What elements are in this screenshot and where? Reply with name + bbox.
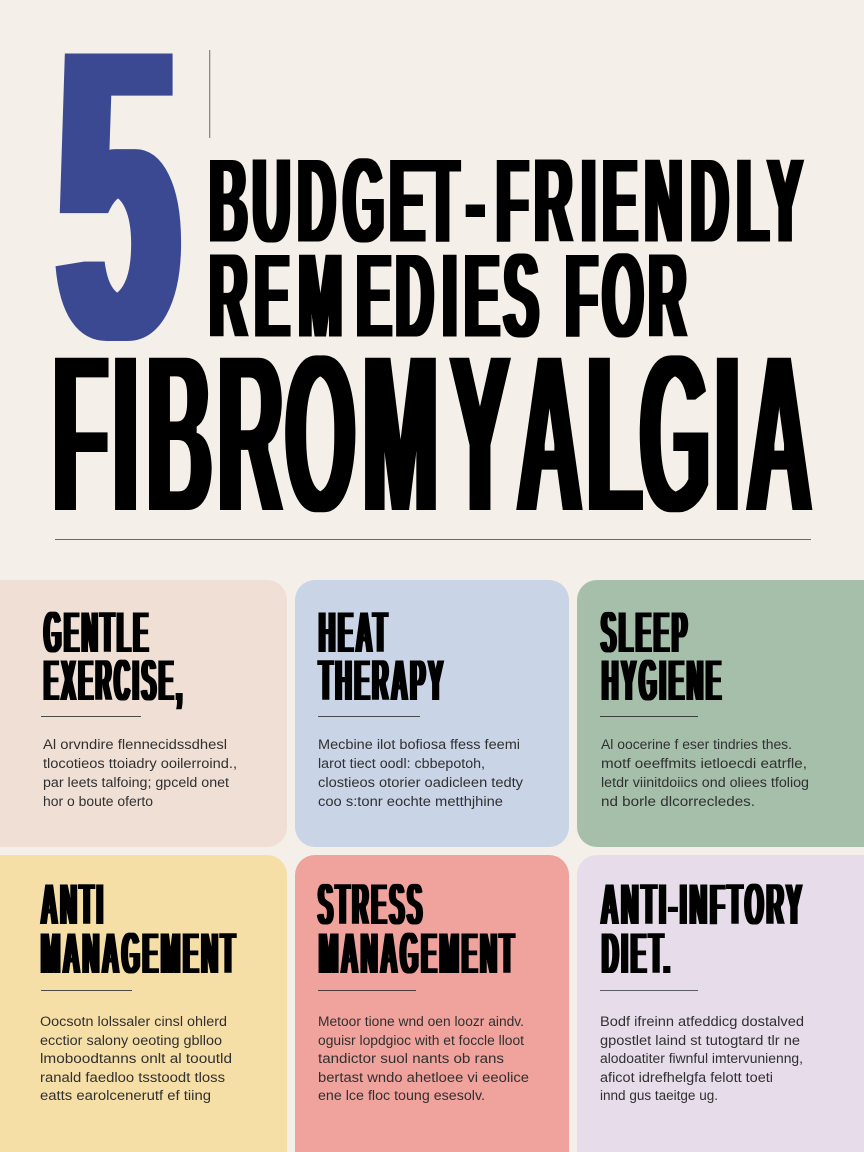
body text: tlocotieos ttoiadry ooilerroind.,: [43, 756, 237, 771]
body text: par leets talfoing; gpceld onet: [43, 775, 229, 790]
body text: oguisr lopdgioc with et foccle lloot: [318, 1033, 524, 1048]
body text: ene lce floc toung esesolv.: [318, 1088, 485, 1103]
body text: larot tiect oodl: cbbepotoh,: [318, 756, 485, 771]
body text: [43, 737, 237, 809]
panel: heat therapy: [295, 580, 569, 847]
title lines 1 and 2: REMEDIES FOR: [209, 227, 686, 363]
panel: anti management: ANTI: [41, 871, 106, 938]
rule: [318, 716, 420, 717]
body text: nd borle dlcorrecledes.: [601, 794, 755, 809]
body text: bertast wndo ahetloee vi eeolice: [318, 1070, 529, 1085]
body text: Metoor tione wnd oen loozr aindv.: [318, 1014, 524, 1029]
body text: hor o boute oferto: [43, 794, 153, 809]
rule: [41, 990, 132, 991]
title lines 1 and 2: [209, 132, 803, 363]
panel: gentle exercise: GENTLE: [44, 599, 151, 666]
rule: [600, 990, 698, 991]
title: [53, 132, 812, 562]
rule: [41, 716, 141, 717]
panel: sleep hygiene: [577, 580, 864, 847]
vertical rule: [209, 50, 210, 138]
body text: innd gus taeitge ug.: [600, 1088, 718, 1103]
panel: heat therapy: THERAPY: [319, 647, 446, 714]
title lines 1 and 2: BUDGET-FRIENDLY: [209, 132, 803, 268]
body text: tandictor suol nants ob rans: [318, 1051, 504, 1066]
body text: coo s:tonr eochte metthjhine: [318, 794, 503, 809]
body text: lmoboodtanns onlt al tooutld: [40, 1051, 232, 1066]
text: MANAGEMENT: [319, 920, 517, 987]
body text: clostieos otorier oadicleen tedty: [318, 775, 523, 790]
body text: Oocsotn lolssaler cinsl ohlerd: [40, 1014, 227, 1029]
body text: alodoatiter fiwnful imtervunienng,: [600, 1051, 803, 1066]
body text: Bodf ifreinn atfeddicg dostalved: [600, 1014, 804, 1029]
rule: [318, 990, 416, 991]
title line 3: FIBROMYALGIA: [53, 305, 812, 562]
body text: [601, 737, 809, 809]
header divider: [55, 539, 811, 540]
panel: stress management: [295, 855, 569, 1152]
body text: letdr viinitdoiics ond oliees tfoliog: [601, 775, 809, 790]
rule: [600, 716, 698, 717]
panel: stress management: STRESS: [318, 871, 425, 938]
panel: anti-inflammatory diet: [577, 855, 864, 1152]
body text: [318, 1014, 529, 1103]
body text: Mecbine ilot bofiosa ffess feemi: [318, 737, 520, 752]
body text: [318, 737, 523, 809]
body text: ecctior salony oeoting gblloo: [40, 1033, 222, 1048]
body text: aficot idrefhelgfa felott toeti: [600, 1070, 773, 1085]
panel: heat therapy: HEAT: [319, 599, 390, 666]
body text: eatts earolcenerutf ef tiing: [40, 1088, 211, 1103]
panel: anti-inflammatory diet: DIET.: [602, 920, 673, 987]
body text: ranald faedloo tsstoodt tloss: [40, 1070, 225, 1085]
text: MANAGEMENT: [41, 920, 238, 987]
panel: gentle exercise: [0, 580, 287, 847]
body text: gpostlet laind st tutogtard tlr ne: [600, 1033, 800, 1048]
body text: Al oocerine f eser tindries thes.: [601, 737, 792, 752]
body text: Al orvndire flennecidssdhesl: [43, 737, 227, 752]
body text: [600, 1014, 804, 1103]
panel: gentle exercise: EXERCISE,: [44, 647, 185, 714]
panel: anti management: [0, 855, 287, 1152]
body text: [40, 1014, 232, 1103]
panel: sleep hygiene: SLEEP: [601, 599, 690, 666]
body text: motf oeeffmits ietloecdi eatrfle,: [601, 756, 807, 771]
